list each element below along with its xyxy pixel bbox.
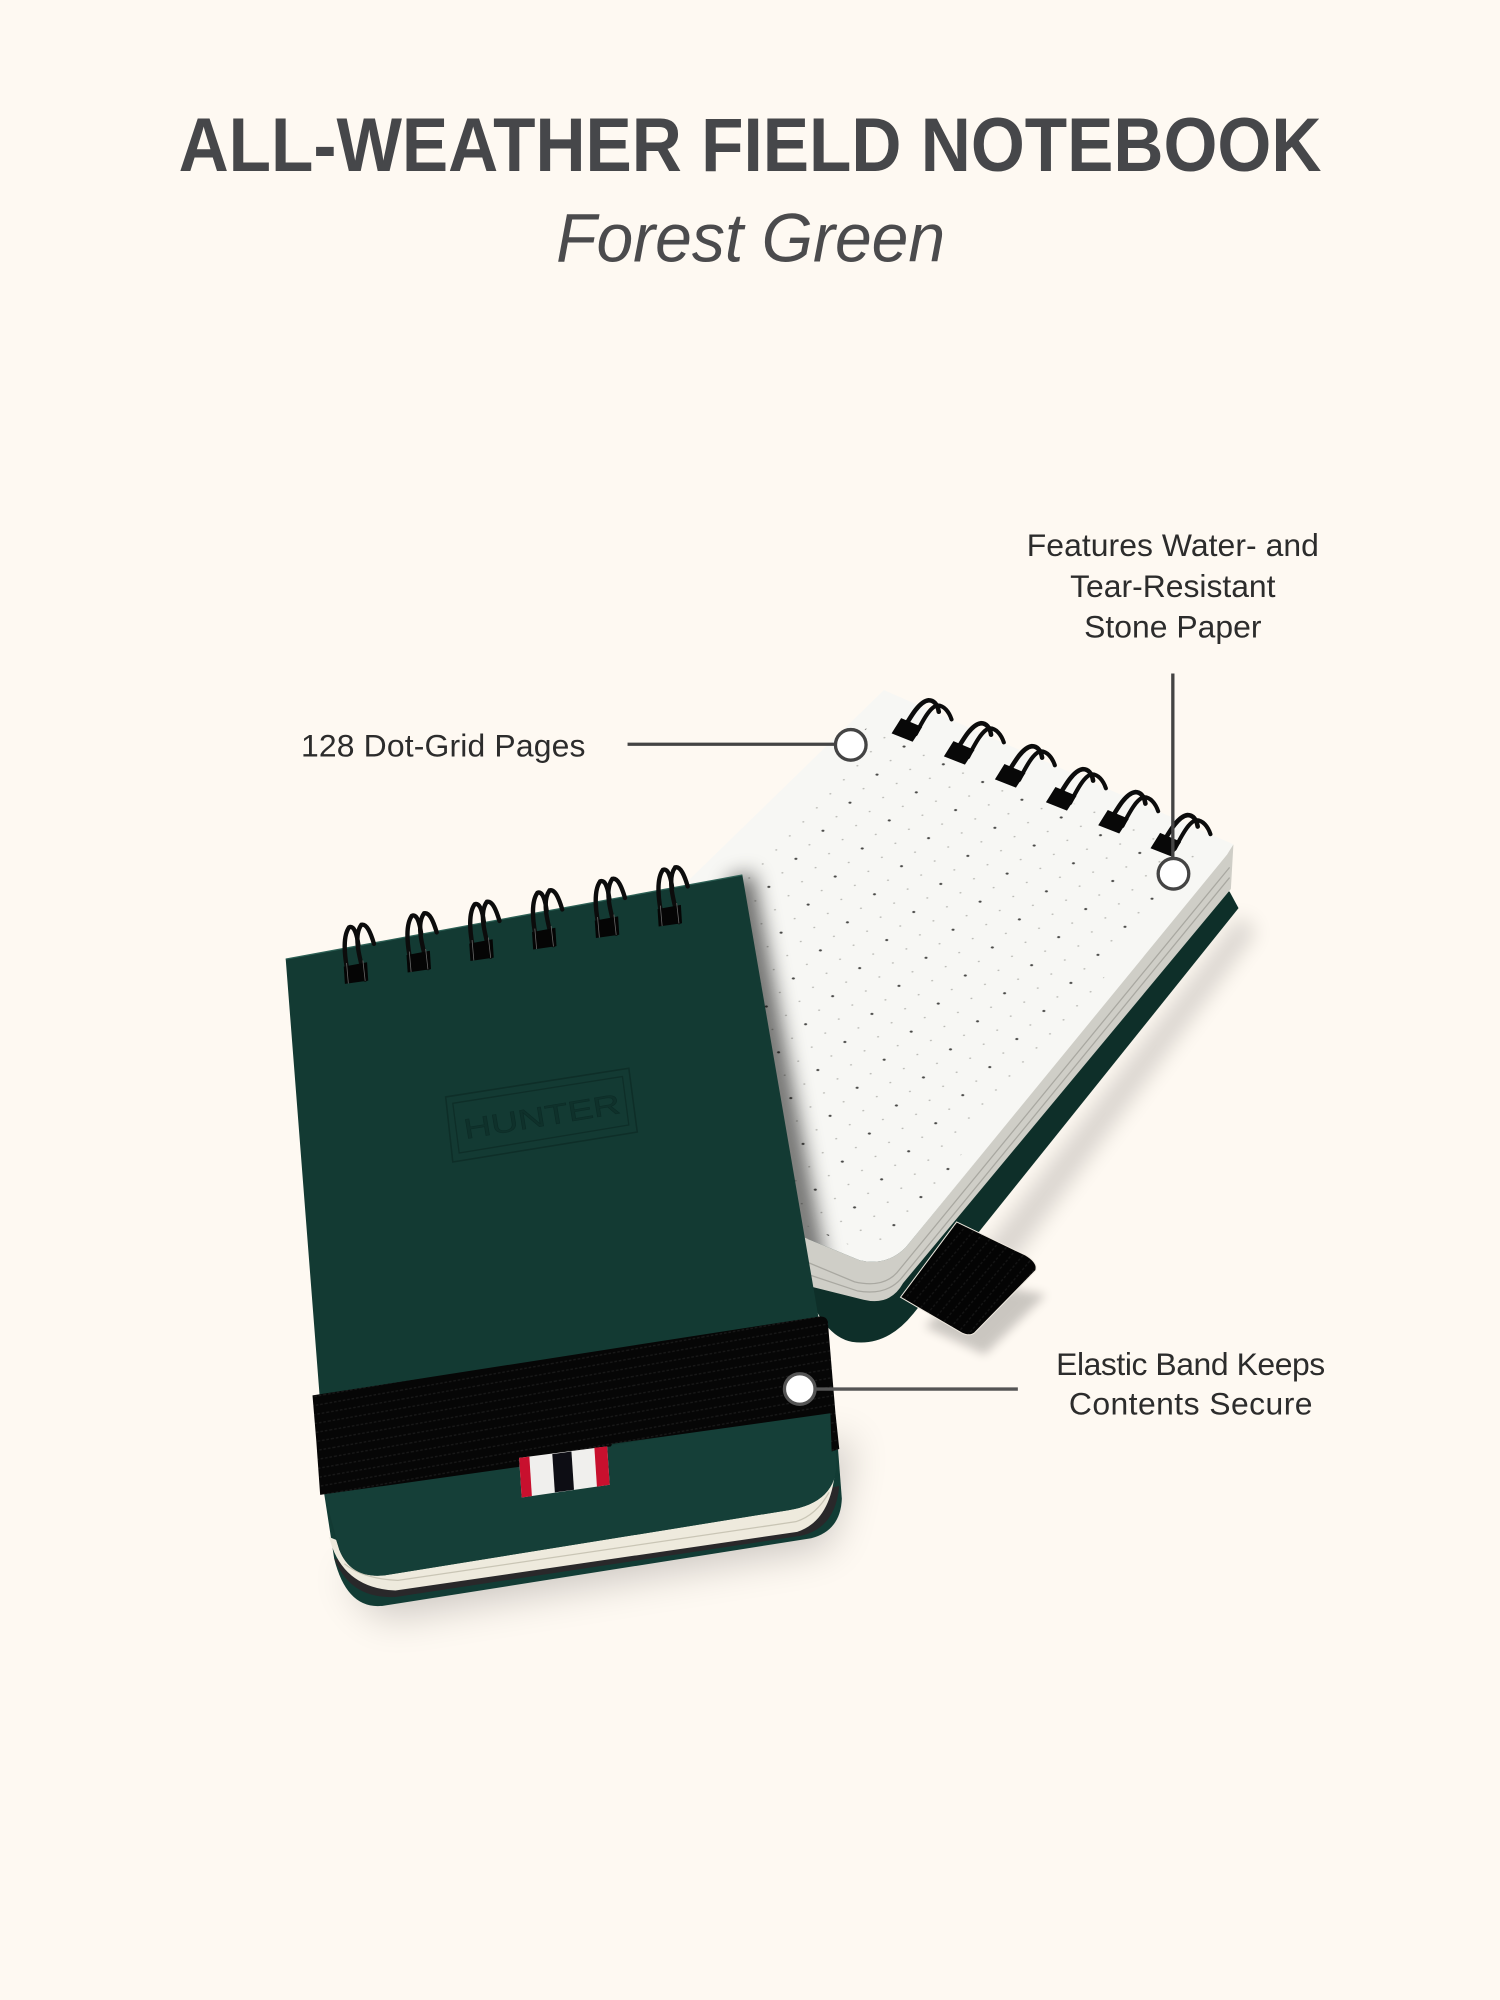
lower flap highlight: [324, 1409, 837, 1576]
back cover: [804, 889, 1239, 1343]
callout: stone paper: Tear-Resistant: [1070, 568, 1276, 604]
elastic band tail: [901, 1222, 1046, 1355]
page edge lines: [809, 867, 1230, 1292]
callout: elastic band: [784, 1346, 1325, 1422]
embossed HUNTER logo: [446, 1068, 637, 1162]
spiral binding, open notebook: [892, 700, 1210, 857]
dot grid: [714, 727, 1205, 1251]
callout: 128 dot-grid pages: [301, 727, 866, 763]
callout: stone paper: Stone Paper: [1084, 609, 1262, 645]
back cover: [324, 1416, 842, 1606]
red white and black tag: [519, 1446, 610, 1497]
page edge lines: [344, 1492, 829, 1580]
dark inner layer: [334, 1486, 839, 1597]
top page: [686, 690, 1233, 1262]
callout: elastic band: Elastic Band Keeps: [1056, 1346, 1325, 1382]
closed notebook: forest green cover: [286, 867, 852, 1617]
spiral binding, closed notebook: [344, 867, 688, 984]
top edge highlight: [286, 875, 742, 959]
open notebook: dot-grid pages: [686, 690, 1256, 1355]
embossed HUNTER logo: HUNTER: [461, 1088, 623, 1145]
drop shadow: [344, 1441, 852, 1617]
callout: elastic band: Contents Secure: [1069, 1386, 1312, 1422]
front cover: [286, 875, 837, 1576]
soft shadow under open notebook: [944, 916, 1256, 1320]
page block: [329, 1467, 835, 1591]
title: ALL-WEATHER FIELD NOTEBOOK: [179, 103, 1321, 188]
callout: 128 dot-grid pages: 128 Dot-Grid Pages: [301, 727, 585, 763]
callout: stone paper: Features Water- and: [1027, 527, 1319, 563]
cover shadow on the page: [727, 872, 832, 1301]
callout: stone paper: [1027, 527, 1319, 889]
page block edge: [804, 844, 1233, 1301]
elastic band: [312, 1316, 839, 1495]
subtitle: Forest Green: [556, 199, 945, 276]
